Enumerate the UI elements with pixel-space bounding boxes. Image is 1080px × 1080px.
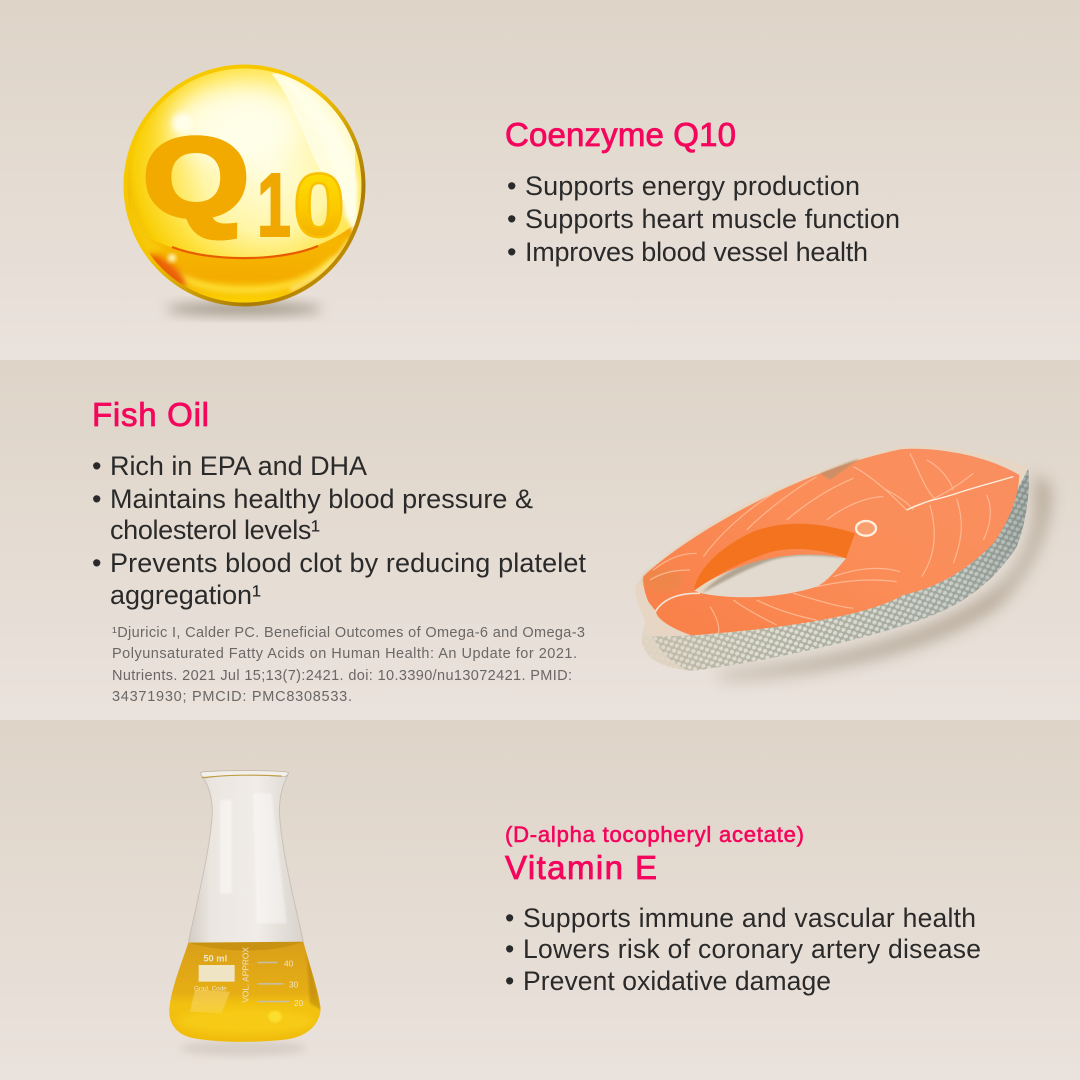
list: Vitamin E benefits: Supports immune and vascular health	[523, 903, 976, 933]
flesh	[643, 449, 1019, 635]
list: Fish Oil benefits: Maintains healthy blood pressure &	[110, 484, 533, 514]
list: Fish Oil benefits: •	[92, 484, 101, 514]
hole interior	[702, 550, 846, 597]
list: Vitamin E benefits: •	[505, 903, 514, 933]
flask markings: 30	[289, 979, 299, 989]
list: Coenzyme Q10 benefits: •	[507, 237, 516, 267]
heading: Vitamin E: Vitamin E	[505, 849, 657, 886]
list: Coenzyme Q10 benefits: Supports heart muscle function	[525, 204, 900, 234]
list: Vitamin E benefits: •	[505, 966, 514, 996]
footnote: citation: 34371930; PMCID: PMC8308533.	[112, 689, 352, 705]
footnote: citation: Nutrients. 2021 Jul 15;13(7):2421. doi: 10.3390/nu13072421. PMID:	[112, 668, 572, 684]
flask markings: 40	[284, 959, 294, 969]
Q10 lettering	[143, 115, 345, 256]
list: Fish Oil benefits: •	[92, 548, 101, 578]
list: Fish Oil benefits: aggregation¹	[110, 580, 261, 610]
subheading: D-alpha tocopheryl acetate: (D-alpha tocopheryl acetate)	[505, 822, 804, 847]
list: Vitamin E benefits	[505, 903, 981, 996]
list: Fish Oil benefits	[92, 451, 586, 610]
flask markings: 50 ml	[203, 953, 227, 963]
footnote: citation: ¹Djuricic I, Calder PC. Beneficial Outcomes of Omega-6 and Omega-3	[112, 625, 585, 641]
list: Coenzyme Q10 benefits: Improves blood vessel health	[525, 237, 868, 267]
flask markings	[194, 947, 304, 1008]
list: Fish Oil benefits: Rich in EPA and DHA	[110, 451, 367, 481]
panel: Coenzyme Q10	[0, 64, 1080, 360]
Q10 lettering: 1	[257, 156, 291, 256]
illustration: flask of yellow oil	[167, 771, 323, 1056]
illustration: salmon steak	[635, 446, 1050, 678]
panel: Vitamin E	[0, 770, 1080, 1080]
Q10 lettering: 0	[293, 156, 345, 256]
list: Coenzyme Q10 benefits: •	[507, 204, 516, 234]
list: Fish Oil benefits: •	[92, 451, 101, 481]
panel: Fish Oil	[0, 402, 1080, 720]
flask markings: 20	[294, 998, 304, 1008]
list: Coenzyme Q10 benefits: •	[507, 171, 516, 201]
footnote: citation: Polyunsaturated Fatty Acids on Human Health: An Update for 2021.	[112, 646, 577, 662]
footnote: citation	[112, 625, 585, 705]
Q10 lettering: Q	[143, 115, 249, 240]
list: Vitamin E benefits: Prevent oxidative damage	[523, 966, 831, 996]
heading: Fish Oil: Fish Oil	[92, 396, 209, 433]
list: Coenzyme Q10 benefits	[507, 171, 900, 267]
icon: Q10 golden capsule sphere	[124, 64, 366, 320]
list: Fish Oil benefits: Prevents blood clot by reducing platelet	[110, 548, 586, 578]
heading: Coenzyme Q10: Coenzyme Q10	[505, 116, 736, 153]
list: Vitamin E benefits: Lowers risk of coronary artery disease	[523, 934, 981, 964]
list: Vitamin E benefits: •	[505, 934, 514, 964]
list: Fish Oil benefits: cholesterol levels¹	[110, 515, 320, 545]
list: Coenzyme Q10 benefits: Supports energy production	[525, 171, 860, 201]
flask markings: Grad. Code	[194, 986, 227, 993]
flask markings: VOL. APPROX	[241, 947, 251, 1003]
